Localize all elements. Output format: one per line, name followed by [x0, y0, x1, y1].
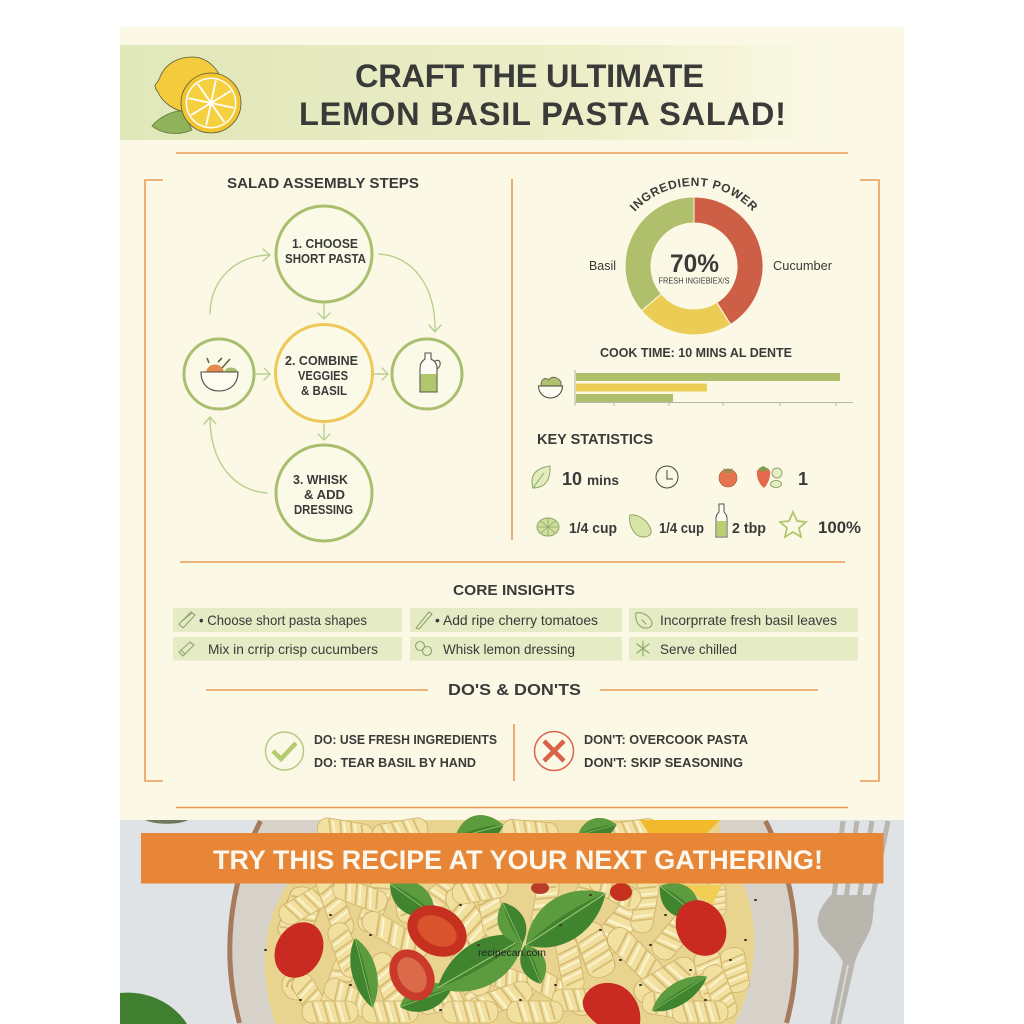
pepper specks	[265, 880, 756, 1010]
panel: do's and don'ts	[266, 682, 749, 770]
donut centre value: FRESH INGIEBIEX/S	[658, 276, 730, 286]
curved heading: ingredient power: INGREDIENT POWER	[630, 178, 757, 212]
panel: ingredient power donut chart	[589, 178, 832, 334]
arrow: bowl to step 2	[256, 368, 270, 380]
title	[299, 58, 786, 132]
arrow: step 2 to step 3	[318, 424, 330, 440]
stat: lime 1/4 cup	[537, 518, 617, 537]
panel: salad assembly steps	[184, 175, 462, 541]
stat: 10 mins: mins	[587, 472, 619, 488]
panel background	[120, 27, 904, 820]
insight: whisk lemon dressing	[410, 637, 622, 660]
donut centre value: 70%	[670, 250, 719, 278]
bars	[576, 373, 840, 402]
photo: pasta salad bowl	[120, 809, 904, 1024]
arrow: step 1 to bottle	[379, 254, 441, 332]
insight: mix in crisp cucumbers	[173, 637, 402, 660]
insight: add ripe cherry tomatoes	[410, 608, 622, 632]
donut centre value	[658, 250, 730, 286]
heading: cook time: COOK TIME: 10 MINS AL DENTE	[600, 346, 792, 360]
basil leaves	[120, 809, 713, 1024]
heading: salad assembly steps: SALAD ASSEMBLY STEPS	[227, 175, 419, 192]
arrow: step 3 to bowl	[204, 417, 267, 493]
icon: bowl	[538, 377, 562, 398]
step 2 circle: & BASIL	[301, 384, 347, 398]
arrow: bowl to step 1	[210, 249, 270, 314]
step 2 circle: VEGGIES	[298, 369, 348, 383]
step 3 circle: 3. WHISK	[293, 473, 348, 487]
stat: star 100%: 100%	[818, 519, 861, 537]
do list	[314, 732, 497, 770]
don't list: DON'T: OVERCOOK PASTA	[584, 732, 749, 747]
panel: cook time bar chart	[538, 346, 853, 406]
watermark: recipecan.com	[478, 948, 546, 959]
icon: check mark	[266, 732, 304, 770]
icon: lemon with slice and leaf	[152, 57, 241, 133]
call-to-action banner	[141, 833, 884, 884]
icon: oil bottle circle	[392, 339, 462, 409]
stat: lemon 1/4 cup: 1/4 cup	[659, 520, 704, 537]
stat: lime 1/4 cup: 1/4 cup	[569, 520, 617, 537]
donut segment: yellow	[642, 294, 731, 335]
icon: cross mark	[534, 732, 574, 770]
stat: strawberry and cucumber count	[757, 466, 808, 489]
insight: add ripe cherry tomatoes: • Add ripe cherry tomatoes	[435, 612, 598, 628]
arrow: step 2 to bottle	[374, 368, 388, 380]
panel: core insights	[173, 582, 858, 660]
icon: salad bowl circle	[184, 339, 254, 409]
title: CRAFT THE ULTIMATE	[355, 58, 704, 94]
stat: lemon 1/4 cup	[630, 515, 704, 537]
step 2 circle: 2. COMBINE	[285, 354, 358, 368]
icon: clock	[656, 466, 678, 488]
step 3 circle: & ADD	[304, 488, 345, 502]
step 1 circle: 1. CHOOSE	[292, 237, 358, 251]
stat: bottle 2 tbp	[716, 504, 766, 537]
stat: 10 mins	[532, 466, 619, 489]
insight: choose short pasta shapes: • Choose short pasta shapes	[199, 612, 367, 628]
step 1 circle: SHORT PASTA	[285, 252, 366, 266]
insight: choose short pasta shapes	[173, 608, 402, 632]
heading: key statistics: KEY STATISTICS	[537, 431, 653, 448]
do list: DO: TEAR BASIL BY HAND	[314, 755, 476, 770]
label: basil: Basil	[589, 259, 616, 273]
title: LEMON BASIL PASTA SALAD!	[299, 96, 786, 132]
insight: incorporate fresh basil leaves	[629, 608, 858, 632]
lemon wedges	[640, 820, 722, 905]
tomatoes	[265, 882, 736, 1024]
centre basil sprig	[427, 874, 617, 1008]
don't list	[584, 732, 749, 770]
bowl	[229, 820, 797, 1024]
stat: star 100%	[780, 512, 861, 537]
insight: mix in crisp cucumbers: Mix in crrip crisp cucumbers	[208, 641, 378, 657]
icon: tomato	[719, 468, 737, 487]
panel: key statistics	[532, 431, 861, 537]
don't list: DON'T: SKIP SEASONING	[584, 755, 743, 770]
insight: serve chilled	[629, 637, 858, 660]
insight: whisk lemon dressing: Whisk lemon dressing	[443, 641, 575, 657]
donut segment: green	[625, 197, 694, 311]
heading: do's and don'ts: DO'S & DON'TS	[448, 682, 581, 699]
call-to-action banner: TRY THIS RECIPE AT YOUR NEXT GATHERING!	[213, 845, 823, 875]
stat: bottle 2 tbp: 2 tbp	[732, 520, 766, 537]
fork	[818, 821, 888, 1024]
step 3 circle	[276, 445, 372, 541]
step 1 circle	[276, 206, 372, 302]
header band	[120, 45, 904, 140]
stat: strawberry and cucumber count: 1	[798, 469, 808, 489]
pasta pieces	[275, 816, 751, 1024]
donut segment: red	[694, 197, 763, 324]
step 3 circle: DRESSING	[294, 503, 353, 517]
do list: DO: USE FRESH INGREDIENTS	[314, 732, 497, 747]
stat: 10 mins: 10	[562, 469, 582, 489]
arrow: step 1 to step 2	[318, 304, 330, 319]
insight: incorporate fresh basil leaves: Incorprrate fresh basil leaves	[660, 612, 837, 628]
heading: core insights: CORE INSIGHTS	[453, 582, 575, 599]
label: cucumber: Cucumber	[773, 259, 832, 273]
insight: serve chilled: Serve chilled	[660, 641, 737, 657]
step 2 circle	[276, 324, 372, 422]
